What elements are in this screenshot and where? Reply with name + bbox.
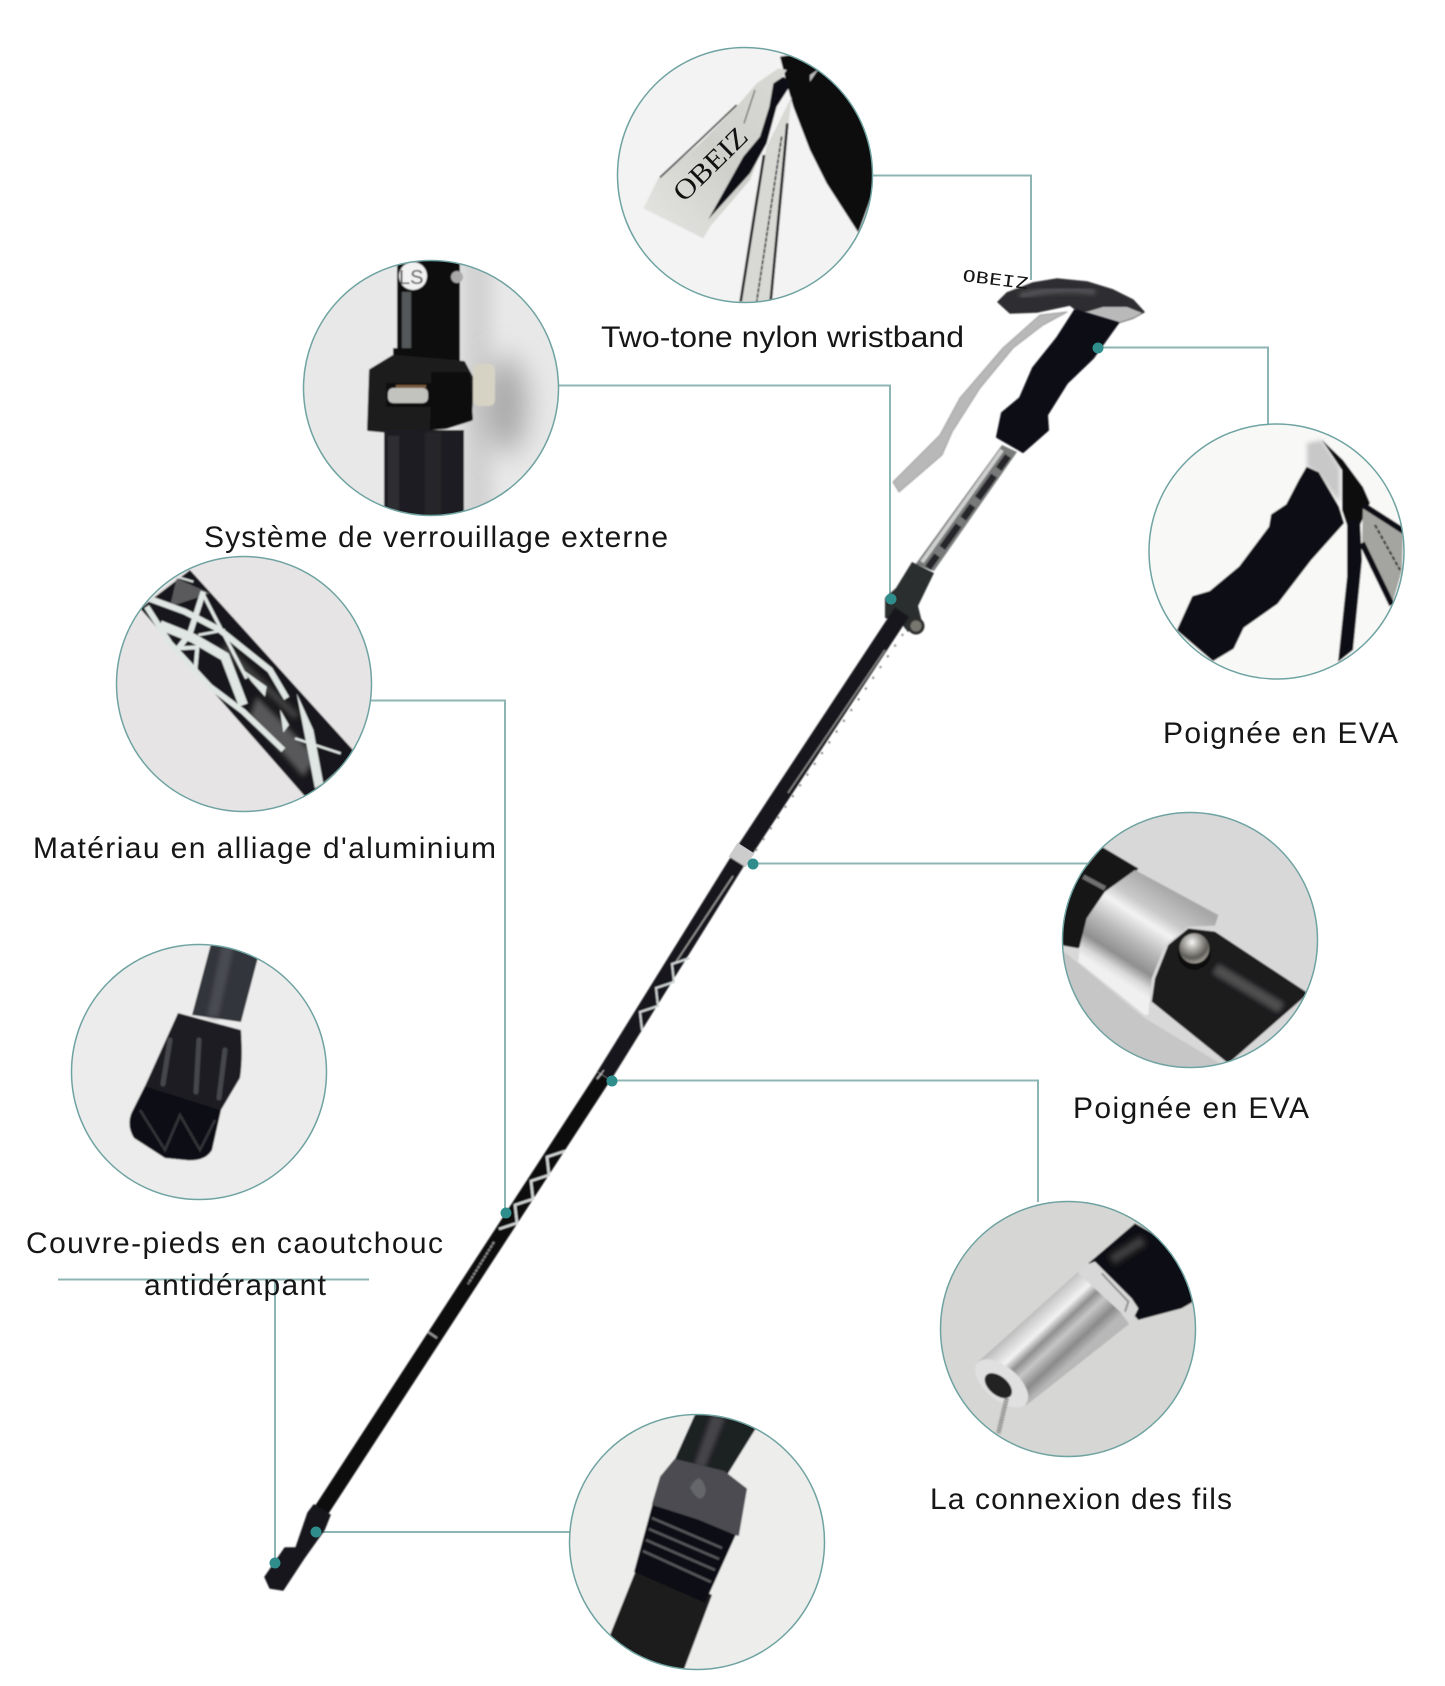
- EVA foam grip: [1178, 468, 1343, 660]
- pole handle knob: [998, 279, 1144, 323]
- black tube: [140, 570, 357, 798]
- heading: aluminium: Matériau en alliage d'aluminium: [33, 832, 496, 865]
- translucent knob: [473, 364, 495, 406]
- cap grooves: [163, 1040, 225, 1098]
- threaded section: [634, 1495, 738, 1603]
- upper shaft: [674, 1415, 756, 1474]
- heading: wristband: Two-tone nylon wristband: [601, 321, 964, 354]
- lower grip: [384, 430, 464, 525]
- open end and wire: [976, 1359, 1029, 1407]
- heading: EVA grip top: Poignée en EVA: [1163, 717, 1398, 750]
- silver body: [978, 1272, 1130, 1405]
- heading: rubber foot cover: antidérapant: [144, 1269, 327, 1302]
- connector lines: [58, 176, 1268, 1562]
- tag text: OBEIZ: [667, 121, 755, 208]
- bright collar: [1078, 1262, 1138, 1325]
- pole upper silver section: [915, 445, 1017, 571]
- panel: rubber foot cover circle: [71, 940, 327, 1200]
- trekking pole: [265, 266, 1144, 1590]
- lower shaft: [610, 1571, 713, 1668]
- black lower tube: [1152, 928, 1308, 1063]
- panel: EVA grip circle: [1149, 424, 1405, 680]
- panel: tip lock circle: [569, 1410, 825, 1680]
- pole lock clamp: [885, 562, 934, 633]
- pole wrist strap: [893, 312, 1067, 492]
- heading: wire connection: La connexion des fils: [930, 1483, 1232, 1516]
- panel: metal ring circle: [1060, 810, 1320, 1070]
- pole section with scale: [743, 612, 903, 856]
- connector dots: [270, 342, 1104, 1568]
- black grip in wristband photo: [780, 53, 880, 233]
- black upper tube: [1060, 847, 1138, 948]
- pole lower section: [319, 1070, 604, 1514]
- panel: aluminium circle: [115, 555, 375, 815]
- pole collar and tip: [265, 1505, 330, 1590]
- grey knob fragment: [1307, 440, 1340, 503]
- upper tube: [397, 255, 460, 355]
- heading: rubber foot cover: [26, 1227, 443, 1302]
- heading: rubber foot cover: Couvre-pieds en caoutchouc: [26, 1227, 443, 1260]
- pole middle section: [604, 862, 737, 1076]
- heading: EVA grip middle: Poignée en EVA: [1073, 1092, 1309, 1125]
- nylon strap: [739, 97, 792, 303]
- black tube: [1088, 1223, 1205, 1320]
- silver ring: [1078, 870, 1218, 1015]
- grey clamp: [653, 1460, 746, 1535]
- lock clamp: [393, 348, 460, 362]
- heading: external lock: Système de verrouillage externe: [204, 521, 668, 554]
- brand mark OBEIZ: OBEIZ: [962, 266, 1030, 293]
- label sticker: [399, 262, 463, 290]
- panel: external lock circle: [303, 250, 559, 530]
- silver pattern: [147, 577, 341, 753]
- strap black: [1338, 520, 1362, 662]
- pole EVA grip: [997, 310, 1118, 452]
- panel: wristband detail circle: [617, 47, 880, 303]
- shaft: [192, 940, 260, 1022]
- label sticker: LS: [399, 267, 423, 289]
- lock slot and pin: [386, 383, 431, 407]
- rubber cap: [129, 1013, 242, 1160]
- panel: wire connection circle: [940, 1200, 1205, 1460]
- ball pin: [1178, 950, 1210, 970]
- strap loop: [1362, 507, 1403, 605]
- strap tag: [643, 68, 787, 238]
- knob black edge: [1322, 440, 1370, 525]
- pole silver ring: [737, 848, 746, 862]
